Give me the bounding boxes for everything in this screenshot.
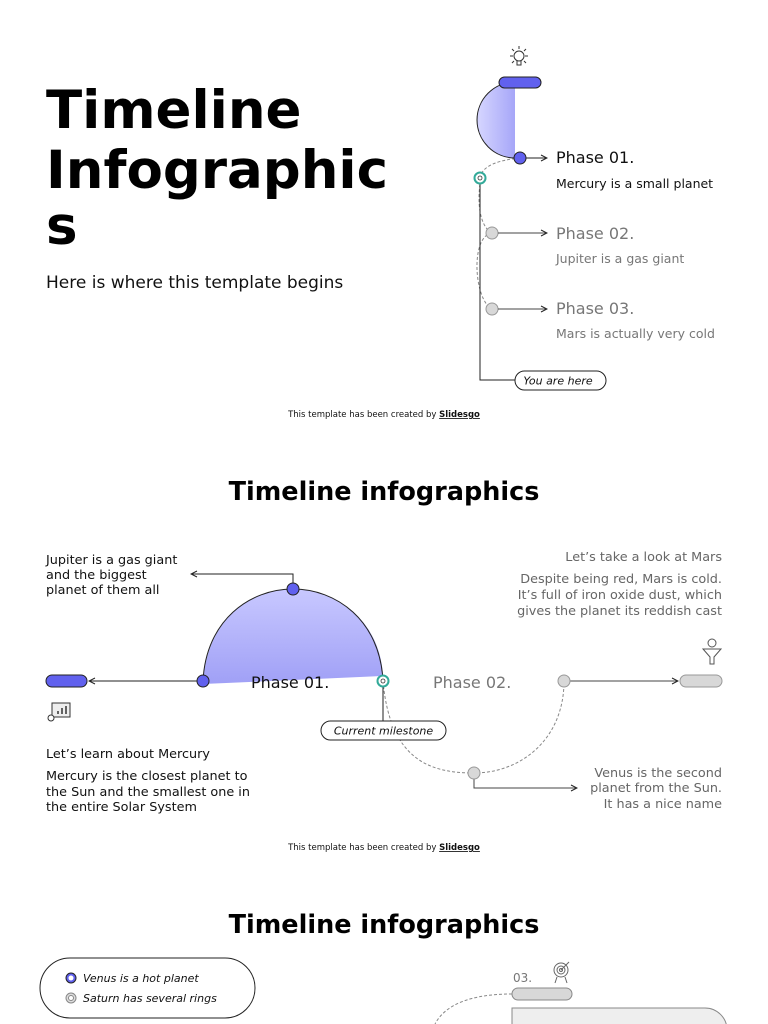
phase 02: Phase 02.: [556, 224, 634, 243]
timeline 2: Phase 02.: [433, 673, 511, 692]
dome: [203, 589, 383, 684]
text: mars: gives the planet its reddish cast: [517, 604, 722, 619]
icon: lightbulb: [510, 46, 528, 65]
phase 03 block: [435, 962, 727, 1024]
icon: presentation: [48, 703, 70, 721]
text: mars: [517, 550, 722, 619]
phase 03 block: 03.: [513, 971, 532, 985]
phase 03: [486, 299, 715, 341]
text: venus: [590, 766, 722, 812]
phase 01: [514, 148, 713, 191]
current milestone label: [321, 721, 446, 740]
text: jupiter: Jupiter is a gas giant: [45, 553, 177, 568]
legend: [40, 958, 255, 1018]
text: venus: planet from the Sun.: [590, 781, 722, 796]
text: mercury: the Sun and the smallest one in: [46, 785, 250, 800]
title: Timeline: [46, 80, 302, 141]
icon: target: [554, 962, 569, 983]
you are here label: [515, 371, 606, 390]
timeline 2: Phase 01.: [251, 673, 329, 692]
text: venus: Venus is the second: [594, 766, 722, 781]
current milestone label: Current milestone: [334, 724, 433, 738]
footer 2: This template has been created by Slidesgo: [287, 843, 480, 853]
legend: Venus is a hot planet: [83, 972, 199, 985]
phase 02: Jupiter is a gas giant: [555, 251, 684, 266]
text: mars: Let’s take a look at Mars: [565, 550, 722, 565]
text: jupiter: [45, 553, 177, 598]
timeline 1: [474, 46, 715, 390]
text: venus: It has a nice name: [604, 797, 722, 812]
text: mercury: Let’s learn about Mercury: [46, 747, 210, 762]
legend: Saturn has several rings: [83, 992, 217, 1005]
subtitle: Here is where this template begins: [46, 273, 343, 293]
phase 03: Phase 03.: [556, 299, 634, 318]
phase 01: Phase 01.: [556, 148, 634, 167]
title: s: [46, 196, 78, 257]
title: [46, 80, 388, 257]
footer 1: This template has been created by Slidesgo: [287, 410, 480, 420]
text: mars: Despite being red, Mars is cold.: [520, 572, 722, 587]
text: mercury: Mercury is the closest planet to: [46, 769, 248, 784]
phase 02: [486, 224, 684, 266]
section 3 title: Timeline infographics: [229, 910, 539, 940]
half disc: [477, 82, 515, 158]
text: mercury: [46, 747, 250, 815]
section 2 title: Timeline infographics: [229, 477, 539, 507]
timeline 2: [45, 550, 722, 815]
you are here label: You are here: [523, 374, 593, 388]
text: jupiter: and the biggest: [46, 568, 147, 583]
text: jupiter: planet of them all: [46, 583, 159, 598]
icon: funnel: [703, 639, 721, 664]
text: mercury: the entire Solar System: [46, 800, 197, 815]
title: Infographic: [46, 140, 388, 201]
phase 01: Mercury is a small planet: [556, 176, 713, 191]
phase 03: Mars is actually very cold: [556, 326, 715, 341]
text: mars: It’s full of iron oxide dust, which: [518, 588, 722, 603]
